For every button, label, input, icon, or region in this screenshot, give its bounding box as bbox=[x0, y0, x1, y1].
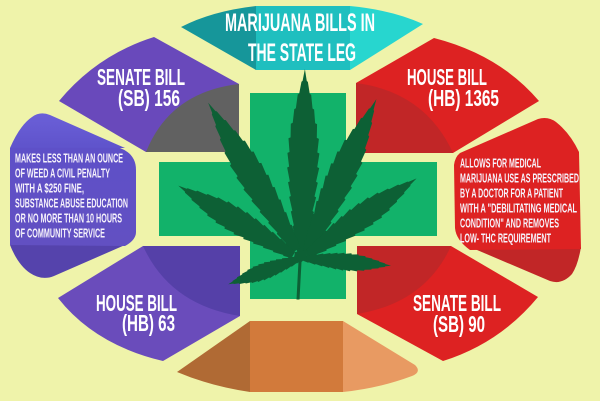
panel: House Bill 63 bbox=[58, 246, 240, 361]
label: House Bill 1365: HOUSE BILL bbox=[407, 64, 487, 90]
label: Senate Bill 90: SENATE BILL bbox=[413, 290, 501, 316]
label: House Bill 63 bbox=[96, 290, 177, 336]
label: Senate Bill 156: (SB) 156 bbox=[118, 85, 180, 111]
description text: OF WEED A CIVIL PENALTY bbox=[15, 166, 110, 180]
label: House Bill 1365 bbox=[407, 64, 499, 111]
label: Senate Bill 90: (SB) 90 bbox=[433, 311, 485, 337]
panel: House Bill 1365 bbox=[356, 38, 539, 153]
panel: Senate Bill 156 bbox=[59, 37, 239, 152]
panel: House Bill 1365 description bbox=[454, 118, 581, 282]
label: House Bill 1365: (HB) 1365 bbox=[428, 85, 499, 111]
label: Senate Bill 90 bbox=[413, 290, 501, 337]
description text bbox=[15, 150, 128, 240]
title text: THE STATE LEG bbox=[248, 39, 356, 67]
description text: WITH A $250 FINE, bbox=[15, 180, 84, 196]
description text: SUBSTANCE ABUSE EDUCATION bbox=[15, 196, 128, 210]
label: House Bill 63: HOUSE BILL bbox=[96, 290, 177, 316]
icon: cannabis leaf bbox=[172, 69, 424, 300]
panel: Senate Bill 156 description bbox=[10, 113, 136, 278]
description text: OF COMMUNITY SERVICE bbox=[15, 226, 105, 240]
description text: MAKES LESS THAN AN OUNCE bbox=[15, 150, 123, 166]
panel: bottom orange blank segment bbox=[177, 321, 418, 392]
title text: MARIJUANA BILLS IN bbox=[225, 9, 375, 37]
title text bbox=[225, 9, 375, 67]
label: Senate Bill 156 bbox=[97, 64, 185, 111]
description text: OR NO MORE THAN 10 HOURS bbox=[15, 210, 122, 226]
panel: Senate Bill 90 bbox=[357, 246, 538, 361]
panel: title banner bbox=[181, 6, 423, 70]
description text bbox=[460, 156, 579, 246]
icon: green medical cross bbox=[159, 93, 437, 299]
label: Senate Bill 156: SENATE BILL bbox=[97, 64, 185, 90]
label: House Bill 63: (HB) 63 bbox=[122, 310, 175, 336]
